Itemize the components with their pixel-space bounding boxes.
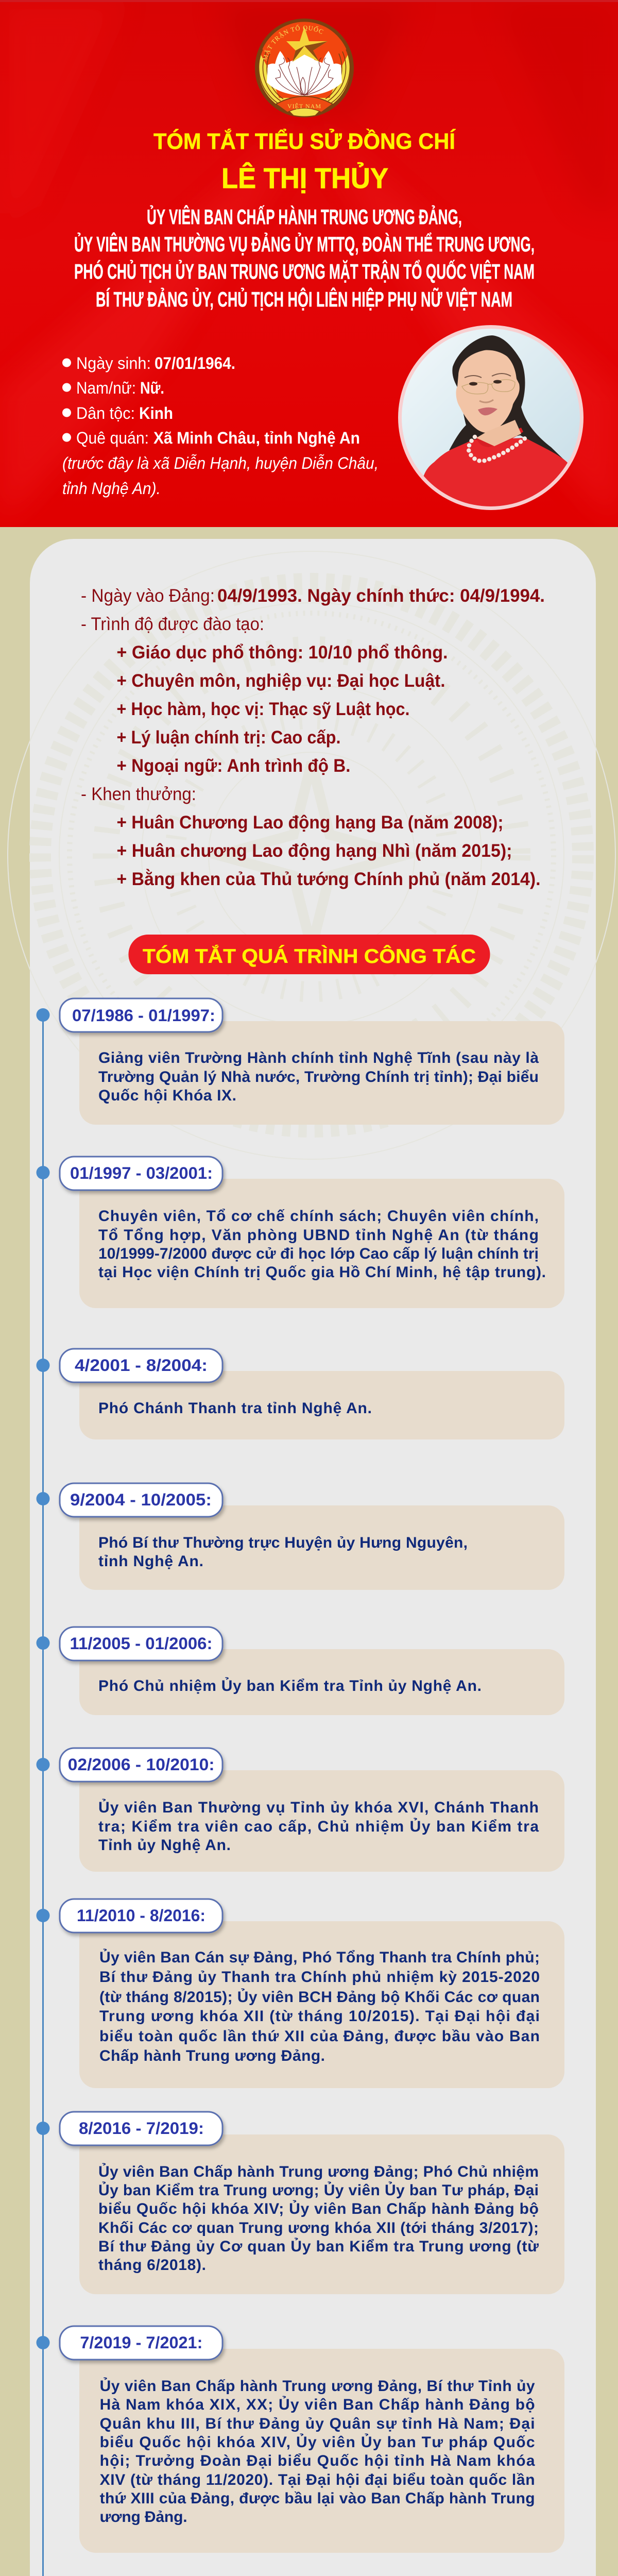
ribbon [276, 96, 333, 112]
heading: work history [129, 935, 490, 974]
timeline entry: 7/2019 - 7/2021: ương Đảng. [100, 2509, 187, 2526]
timeline entry: 7/2019 - 7/2021: hội; Trưởng Đoàn Đại biểu Quốc hội tỉnh Hà Nam khóa [100, 2452, 535, 2469]
personal details: Dân tộc: [76, 404, 135, 422]
timeline entry: 02/2006 - 10/2010: tra; Kiểm tra viên cao cấp, Chủ nhiệm Ủy ban Kiểm tra [98, 1818, 539, 1835]
timeline entry: 8/2016 - 7/2019: tháng 6/2018). [98, 2257, 206, 2274]
text block: party and education info: + Học hàm, học vị: Thạc sỹ Luật học. [116, 699, 410, 719]
timeline entry: 11/2010 - 8/2016: Trung ương khóa XII (từ tháng 10/2015). Tại Đại hội đại [99, 2008, 540, 2025]
timeline entry: 7/2019 - 7/2021: 7/2019 - 7/2021: [80, 2333, 202, 2352]
dress [423, 438, 568, 506]
title: LÊ THỊ THỦY [221, 162, 388, 194]
face [456, 349, 520, 433]
timeline entry: 8/2016 - 7/2019: Bí thư Đảng ủy Cơ quan Ủy ban Kiểm tra Trung ương (từ [98, 2238, 539, 2255]
timeline entry: 7/2019 - 7/2021: thứ XIII của Đảng, được bầu lại vào Ban Chấp hành Trung [100, 2490, 535, 2507]
timeline entry: 11/2005 - 01/2006: Phó Chủ nhiệm Ủy ban Kiểm tra Tỉnh ủy Nghệ An. [98, 1677, 482, 1694]
text block: party and education info: + Giáo dục phổ thông: 10/10 phổ thông. [116, 642, 448, 663]
timeline entry: 4/2001 - 8/2004 [36, 1349, 564, 1439]
glasses and features [462, 380, 515, 394]
timeline entry: 11/2010 - 8/2016: Ủy viên Ban Cán sự Đảng, Phó Tổng Thanh tra Chính phủ; [99, 1948, 540, 1966]
subtitle: positions [74, 205, 535, 311]
timeline entry: 7/2019 - 7/2021: biểu Quốc hội khóa XIV, Ủy viên Ủy ban Tư pháp Quốc [100, 2433, 535, 2451]
personal details: Nam/nữ: [76, 379, 136, 397]
personal details: (trước đây là xã Diễn Hạnh, huyện Diễn Châu, [62, 454, 379, 472]
timeline entry: 07/1986 - 01/1997 [36, 998, 564, 1125]
timeline entry: 01/1997 - 03/2001 [36, 1157, 564, 1308]
timeline entry: 11/2010 - 8/2016: biểu toàn quốc lần thứ XII của Đảng, được bầu vào Ban [99, 2028, 540, 2045]
timeline entry: 8/2016 - 7/2019: Ủy ban Kiểm tra Trung ương; Ủy viên Ủy ban Tư pháp, Đại [98, 2181, 539, 2199]
text block: party and education info [81, 586, 545, 889]
timeline entry: 01/1997 - 03/2001: Tổ Tổng hợp, Văn phòng UBND tỉnh Nghệ An (từ tháng [98, 1227, 539, 1244]
timeline entry: 07/1986 - 01/1997: 07/1986 - 01/1997: [72, 1006, 215, 1025]
timeline entry: 02/2006 - 10/2010: Tỉnh ủy Nghệ An. [98, 1837, 231, 1854]
timeline entry: 02/2006 - 10/2010: 02/2006 - 10/2010: [68, 1755, 215, 1774]
text block: party and education info: + Lý luận chính trị: Cao cấp. [116, 727, 341, 748]
timeline entry: 8/2016 - 7/2019: biểu Quốc hội khóa XIV; Ủy viên Ban Chấp hành Đảng bộ [98, 2200, 539, 2217]
timeline entry: 07/1986 - 01/1997: Quốc hội Khóa IX. [98, 1087, 236, 1104]
timeline entry: 8/2016 - 7/2019: 8/2016 - 7/2019: [79, 2119, 204, 2138]
timeline entry: 11/2005 - 01/2006 [36, 1627, 564, 1715]
text block: party and education info: + Bằng khen của Thủ tướng Chính phủ (năm 2014). [116, 869, 541, 889]
personal details: Xã Minh Châu, tỉnh Nghệ An [153, 429, 360, 447]
star [286, 27, 328, 62]
timeline entry: 7/2019 - 7/2021: Quân khu III, Bí thư Đảng ủy Quân sự tỉnh Hà Nam; Đại [100, 2415, 535, 2432]
timeline entry: 01/1997 - 03/2001: 01/1997 - 03/2001: [70, 1164, 213, 1182]
timeline entry: 11/2005 - 01/2006: 11/2005 - 01/2006: [70, 1634, 212, 1653]
title [153, 128, 456, 194]
timeline entry: 07/1986 - 01/1997: Trường Quản lý Nhà nước, Trường Chính trị tỉnh); Đại biểu [98, 1069, 539, 1086]
timeline entry: 11/2010 - 8/2016: Chấp hành Trung ương Đảng. [99, 2047, 325, 2064]
icon: Mặt trận Tổ quốc emblem: MẶT TRẬN TỔ QUỐC [263, 25, 323, 61]
timeline entry: 4/2001 - 8/2004: 4/2001 - 8/2004: [75, 1356, 208, 1375]
icon: Mặt trận Tổ quốc emblem: VIỆT NAM [287, 103, 321, 110]
timeline entry: 02/2006 - 10/2010 [36, 1748, 564, 1872]
timeline entry: 8/2016 - 7/2019 [36, 2112, 564, 2294]
timeline entry: 01/1997 - 03/2001: 10/1999-7/2000 được cử đi học lớp Cao cấp lý luận chính trị [98, 1245, 539, 1262]
timeline entry: 8/2016 - 7/2019: Ủy viên Ban Chấp hành Trung ương Đảng; Phó Chủ nhiệm [98, 2163, 539, 2180]
timeline line [42, 1015, 44, 2576]
timeline entry: 9/2004 - 10/2005: Phó Bí thư Thường trực Huyện ủy Hưng Nguyên, [98, 1534, 468, 1551]
timeline entry: 01/1997 - 03/2001: Chuyên viên, Tổ cơ chế chính sách; Chuyên viên chính, [98, 1208, 539, 1225]
timeline entry: 9/2004 - 10/2005: 9/2004 - 10/2005: [70, 1490, 212, 1509]
decorative drum pattern [8, 551, 615, 1159]
timeline entry: 11/2010 - 8/2016: (từ tháng 8/2015); Ủy viên BCH Đảng bộ Khối Các cơ quan [99, 1988, 540, 2006]
timeline entry: 9/2004 - 10/2005: tỉnh Nghệ An. [98, 1553, 203, 1570]
personal details: Kinh [139, 404, 173, 422]
panel: main content [8, 539, 615, 2576]
text block: party and education info: 04/9/1993. Ngày chính thức: 04/9/1994. [217, 586, 545, 606]
timeline entry: 01/1997 - 03/2001: tại Học viện Chính trị Quốc gia Hồ Chí Minh, hệ tập trung). [98, 1264, 546, 1281]
timeline entry: 02/2006 - 10/2010: Ủy viên Ban Thường vụ Tỉnh ủy khóa XVI, Chánh Thanh [98, 1799, 539, 1816]
text block: party and education info: + Ngoại ngữ: Anh trình độ B. [116, 756, 350, 776]
timeline entry: 11/2010 - 8/2016: Bí thư Đảng ủy Thanh tra Chính phủ nhiệm kỳ 2015-2020 [99, 1969, 540, 1986]
portrait [397, 325, 587, 515]
heading: work history: TÓM TẮT QUÁ TRÌNH CÔNG TÁC [143, 944, 476, 968]
timeline entry: 4/2001 - 8/2004: Phó Chánh Thanh tra tỉnh Nghệ An. [98, 1400, 372, 1417]
timeline entry: 7/2019 - 7/2021 [36, 2326, 564, 2553]
timeline entry: 11/2010 - 8/2016: 11/2010 - 8/2016: [77, 1906, 205, 1925]
personal details: Nữ. [140, 379, 164, 397]
personal details [62, 354, 379, 498]
timeline entry: 11/2010 - 8/2016 [36, 1899, 564, 2088]
pearls [469, 436, 527, 461]
text block: party and education info: - Trình độ được đào tạo: [81, 614, 264, 634]
personal details: Ngày sinh: [76, 354, 151, 372]
text block: party and education info: + Huân chương Lao động hạng Nhì (năm 2015); [116, 841, 512, 861]
lotus [267, 45, 342, 96]
personal details: Quê quán: [76, 429, 149, 447]
personal details: 07/01/1964. [154, 354, 235, 372]
hair [449, 335, 566, 462]
text block: party and education info: - Khen thưởng: [81, 784, 196, 804]
timeline entry: 7/2019 - 7/2021: Hà Nam khóa XIX, XX; Ủy viên Ban Chấp hành Đảng bộ [100, 2396, 535, 2413]
timeline entry: 9/2004 - 10/2005 [36, 1483, 564, 1590]
timeline entry: 8/2016 - 7/2019: Khối Các cơ quan Trung ương khóa XII (tới tháng 3/2017); [98, 2219, 539, 2236]
personal details: tỉnh Nghệ An). [62, 479, 161, 498]
timeline entry: 7/2019 - 7/2021: Ủy viên Ban Chấp hành Trung ương Đảng, Bí thư Tỉnh ủy [100, 2377, 535, 2395]
icon: Mặt trận Tổ quốc emblem [255, 19, 354, 117]
text block: party and education info: + Chuyên môn, nghiệp vụ: Đại học Luật. [116, 671, 445, 691]
title: TÓM TẮT TIỂU SỬ ĐỒNG CHÍ [153, 128, 456, 154]
timeline entry: 7/2019 - 7/2021: XIV (từ tháng 11/2020). Tại Đại hội đại biểu toàn quốc lần [100, 2471, 535, 2488]
timeline entry: 07/1986 - 01/1997: Giảng viên Trường Hành chính tỉnh Nghệ Tĩnh (sau này là [98, 1049, 539, 1066]
text block: party and education info: + Huân Chương Lao động hạng Ba (năm 2008); [116, 812, 504, 833]
text block: party and education info: - Ngày vào Đảng: [81, 586, 215, 606]
